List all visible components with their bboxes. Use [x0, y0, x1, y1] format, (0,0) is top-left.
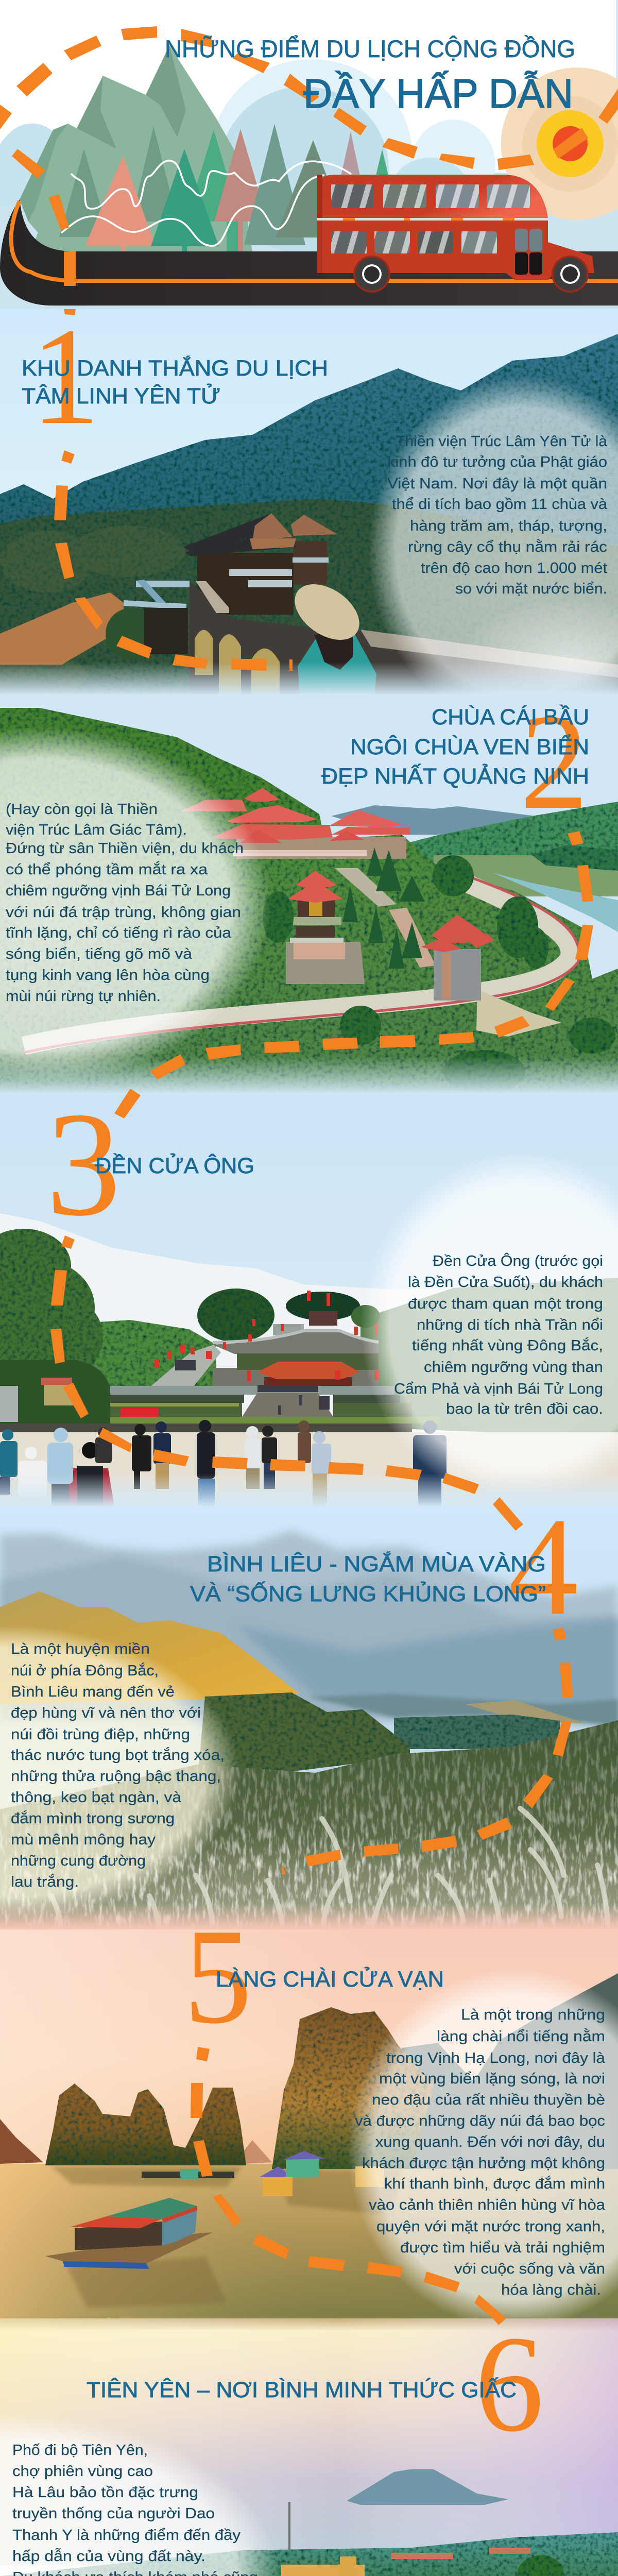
- text block: Cái Bầu: viện Trúc Lâm Giác Tâm).: [6, 822, 187, 838]
- section 2: Cái Bầu: [0, 686, 618, 1095]
- text block: Đền Cửa Ông: [394, 1252, 603, 1417]
- text block: Bình Liêu: lau trắng.: [11, 1873, 79, 1890]
- orange dashed route: section 1: [54, 309, 293, 671]
- bus door: [515, 229, 542, 275]
- text block: Cái Bầu: sóng biển, tiếng gõ mõ và: [6, 946, 193, 962]
- text block: Cửa Vạn: Là một trong những: [461, 2007, 605, 2023]
- orange dashed route: section 6: [493, 2318, 506, 2325]
- orange dashed route: header: [0, 26, 618, 286]
- section 6: Tiên Yên: [0, 2307, 618, 2576]
- text block: Đền Cửa Ông: là Đền Cửa Suốt), du khách: [408, 1274, 603, 1291]
- road: [0, 199, 618, 306]
- reed plumes: [52, 1808, 608, 1927]
- white winding lines: [61, 161, 351, 246]
- text block: Cái Bầu: có thể phóng tầm mắt ra xa: [6, 861, 208, 878]
- text block: Cửa Vạn: khách được tận hưởng một không: [362, 2155, 605, 2172]
- text block: Bình Liêu: thông, keo bạt ngàn, và: [11, 1789, 182, 1806]
- text block: Tiên Yên: Thanh Y là những điểm đến đầy: [12, 2527, 241, 2544]
- text block: Cửa Vạn: [355, 2007, 606, 2298]
- text block: Cửa Vạn: với cuộc sống và văn: [454, 2261, 605, 2277]
- text block: Bình Liêu: đẹp hùng vĩ và nên thơ với: [11, 1705, 201, 1721]
- heading: Cái Bầu: NGÔI CHÙA VEN BIỂN: [350, 734, 589, 759]
- number 4: 4: [508, 1489, 578, 1644]
- text block: Cửa Vạn: được tìm hiểu và trải nghiệm: [400, 2240, 605, 2256]
- text block: Cửa Vạn: một vùng biển lặng sóng, là nơi: [379, 2071, 605, 2087]
- text block: Đền Cửa Ông: những di tích nhà Trần nổi: [417, 1317, 603, 1333]
- mist panel: [360, 1151, 618, 1502]
- floating houses: [142, 2151, 384, 2196]
- text block: Bình Liêu: Là một huyện miền: [11, 1641, 150, 1657]
- heading: Cái Bầu: ĐẸP NHẤT QUẢNG NINH: [321, 764, 589, 789]
- pine trees: [59, 124, 388, 251]
- text block: Bình Liêu: những thửa ruộng bậc thang,: [11, 1768, 221, 1785]
- text block: Tiên Yên: [12, 2442, 264, 2576]
- heading: Bình Liêu: BÌNH LIÊU - NGẮM MÙA VÀNG: [207, 1551, 546, 1577]
- text block: Yên Tử: trên độ cao hơn 1.000 mét: [421, 560, 607, 577]
- mist panel: [0, 2414, 281, 2576]
- text block: Cửa Vạn: vào cảnh thiên nhiên hùng vĩ hòa: [369, 2197, 606, 2213]
- text block: Đền Cửa Ông: Đền Cửa Ông (trước gọi: [433, 1252, 603, 1269]
- stone arch bridge: [190, 581, 618, 696]
- text block: Bình Liêu: đắm mình trong sương: [11, 1810, 175, 1827]
- text block: Cái Bầu: [6, 801, 244, 1005]
- section 1: Yên Tử: [0, 299, 618, 696]
- heading: Đền Cửa Ông: ĐỀN CỬA ÔNG: [95, 1153, 254, 1178]
- text block: Cửa Vạn: và được những dãy núi đá bao bọc: [355, 2113, 605, 2129]
- text block: Đền Cửa Ông: chiêm ngưỡng vùng than: [424, 1359, 603, 1376]
- pagoda tower: [286, 871, 365, 984]
- mist panel: [348, 1968, 618, 2318]
- orange dashed route: section 3: [50, 1089, 479, 1494]
- temple gate: [421, 914, 494, 1001]
- icon: red double-decker bus: [317, 175, 594, 293]
- Cái Bầu road: [24, 874, 579, 1053]
- Cửa Ông temple roof: [258, 1362, 359, 1387]
- text block: Cửa Vạn: khí thanh bình, được đắm mình: [384, 2175, 605, 2192]
- title: ĐẦY HẤP DẪN: [303, 71, 573, 116]
- text block: Bình Liêu: núi ở phía Đông Bắc,: [11, 1662, 159, 1679]
- mist panel: [0, 726, 273, 1084]
- photo: Cửa Ông temple: [0, 1095, 618, 1507]
- text block: Bình Liêu: mù mênh mông hay: [11, 1832, 156, 1848]
- number 6: 6: [475, 2307, 544, 2460]
- trees: [263, 855, 615, 1093]
- text block: Yên Tử: Thiền viện Trúc Lâm Yên Tử là: [396, 433, 608, 450]
- heading: Bình Liêu: VÀ “SỐNG LƯNG KHỦNG LONG”: [190, 1581, 546, 1606]
- heading: Tiên Yên: TIÊN YÊN – NƠI BÌNH MINH THỨC GIẤC: [87, 2378, 517, 2402]
- orange dashed route: section 5: [191, 2047, 506, 2318]
- text block: Tiên Yên: Hà Lâu bảo tồn đặc trưng: [12, 2484, 198, 2501]
- orange dashed route: section 4: [282, 1497, 573, 1874]
- road centre line: [11, 201, 618, 281]
- text block: Yên Tử: rừng cây cổ thụ nằm rải rác: [408, 538, 607, 555]
- text block: Tiên Yên: Phố đi bộ Tiên Yên,: [12, 2442, 148, 2459]
- text block: Yên Tử: hàng trăm am, tháp, tượng,: [410, 518, 607, 534]
- section 5: Làng chài Cửa Vạn: [0, 1901, 618, 2318]
- text block: Tiên Yên: truyền thống của người Dao: [12, 2505, 215, 2522]
- text block: Bình Liêu: Bình Liêu mang đến vẻ: [11, 1684, 175, 1700]
- heading: Cái Bầu: CHÙA CÁI BẦU: [432, 705, 589, 730]
- text block: Đền Cửa Ông: Cẩm Phả và vịnh Bái Tử Long: [394, 1381, 603, 1397]
- text block: Cái Bầu: tĩnh lặng, chỉ có tiếng rì rào của: [6, 925, 232, 941]
- title: [165, 35, 575, 116]
- text block: Cái Bầu: tụng kinh vang lên hòa cùng: [6, 967, 210, 984]
- red flags: [154, 1291, 379, 1381]
- heading: Cửa Vạn: LÀNG CHÀI CỬA VẠN: [216, 1967, 444, 1992]
- text block: Tiên Yên: chợ phiên vùng cao: [12, 2463, 153, 2480]
- text block: Yên Tử: [387, 433, 608, 597]
- number 2: 2: [520, 686, 588, 838]
- text block: Đền Cửa Ông: được tham quan một trong: [408, 1296, 603, 1312]
- text block: Yên Tử: Việt Nam. Nơi đây là một quần: [387, 476, 607, 492]
- icon: sun: [501, 67, 618, 220]
- photo: Tiên Yên town: [0, 2318, 618, 2576]
- number 5: 5: [184, 1901, 252, 2052]
- bus wheels: [353, 256, 589, 293]
- mist panel: [368, 376, 618, 696]
- heading: Cái Bầu: [321, 705, 589, 789]
- section 3: Đền Cửa Ông: [0, 1081, 618, 1507]
- large trees: [272, 2555, 574, 2576]
- stairs: [335, 868, 561, 1037]
- text block: Cái Bầu: với núi đá trập trùng, không gian: [6, 904, 241, 921]
- photo: Bình Liêu mountains and reed grass: [0, 1507, 618, 1929]
- text block: Cái Bầu: chiêm ngưỡng vịnh Bái Tử Long: [6, 883, 231, 899]
- photo: Cửa Vạn fishing village: [0, 1929, 618, 2318]
- heading: Bình Liêu: [190, 1551, 546, 1606]
- text block: Đền Cửa Ông: bao la từ trên đồi cao.: [446, 1401, 603, 1417]
- text block: Yên Tử: thể di tích bao gồm 11 chùa và: [392, 496, 608, 513]
- text block: Bình Liêu: những cung đường: [11, 1853, 146, 1869]
- heading: Yên Tử: TÂM LINH YÊN TỬ: [22, 383, 220, 409]
- text block: Cửa Vạn: trong Vịnh Hạ Long, nơi đây là: [386, 2050, 606, 2066]
- photo: Cái Bầu pagoda: [0, 696, 618, 1095]
- fishing boat house: [45, 2198, 213, 2269]
- stone wall: [213, 1331, 379, 1386]
- text block: Cái Bầu: Đứng từ sân Thiền viện, du khách: [6, 840, 244, 857]
- number 3: 3: [46, 1081, 121, 1247]
- section: header illustration: [0, 0, 618, 309]
- distant buildings: [273, 2548, 618, 2576]
- hilltop trees: [197, 1289, 380, 1342]
- orange dashed route: section 2: [150, 831, 593, 1079]
- text block: Cửa Vạn: hóa làng chài.: [501, 2282, 601, 2298]
- heading: Yên Tử: KHU DANH THẮNG DU LỊCH: [22, 355, 328, 381]
- text block: Cái Bầu: (Hay còn gọi là Thiền: [6, 801, 158, 818]
- sky clouds: [211, 59, 495, 253]
- heading: Yên Tử: [22, 355, 328, 409]
- bus windows: [331, 184, 530, 253]
- water reflections: [52, 2166, 402, 2308]
- text block: Tiên Yên: hấp dẫn của vùng đất này.: [12, 2548, 205, 2565]
- red-roofed temple: [180, 788, 410, 859]
- photo: Yên Tử mountain and temple: [0, 309, 618, 696]
- mist panel: [0, 1625, 239, 1919]
- left big tree: [0, 1229, 103, 1391]
- text block: Cửa Vạn: xung quanh. Đến với nơi đây, du: [375, 2134, 605, 2150]
- section 4: Bình Liêu: [0, 1489, 618, 1929]
- text block: Bình Liêu: núi đồi trùng điệp, những: [11, 1726, 190, 1743]
- text block: Bình Liêu: thác nước tung bọt trắng xóa,: [11, 1747, 225, 1764]
- text block: Yên Tử: kinh đô tư tưởng của Phật giáo: [387, 454, 607, 470]
- title: NHỮNG ĐIỂM DU LỊCH CỘNG ĐỒNG: [165, 35, 575, 62]
- conifers: [342, 848, 425, 969]
- crowd on steps: [175, 1360, 330, 1415]
- temple: [124, 513, 337, 654]
- text block: Cái Bầu: mùi núi rừng tự nhiên.: [6, 988, 161, 1005]
- number 1: 1: [31, 299, 100, 453]
- text block: Bình Liêu: [11, 1641, 225, 1890]
- text block: Yên Tử: so với mặt nước biển.: [455, 581, 607, 597]
- text block: Cửa Vạn: quyện với mặt nước trong xanh,: [376, 2218, 605, 2235]
- woman in conical hat: [284, 573, 376, 696]
- crowd of visitors: [0, 1420, 447, 1507]
- mountains: [20, 45, 252, 251]
- text block: Cửa Vạn: làng chài nổi tiếng nằm: [437, 2028, 605, 2045]
- text block: Đền Cửa Ông: tiếng nhất vùng Đông Bắc,: [412, 1337, 603, 1354]
- text block: Cửa Vạn: neo đậu của rất nhiều thuyền bè: [372, 2092, 605, 2108]
